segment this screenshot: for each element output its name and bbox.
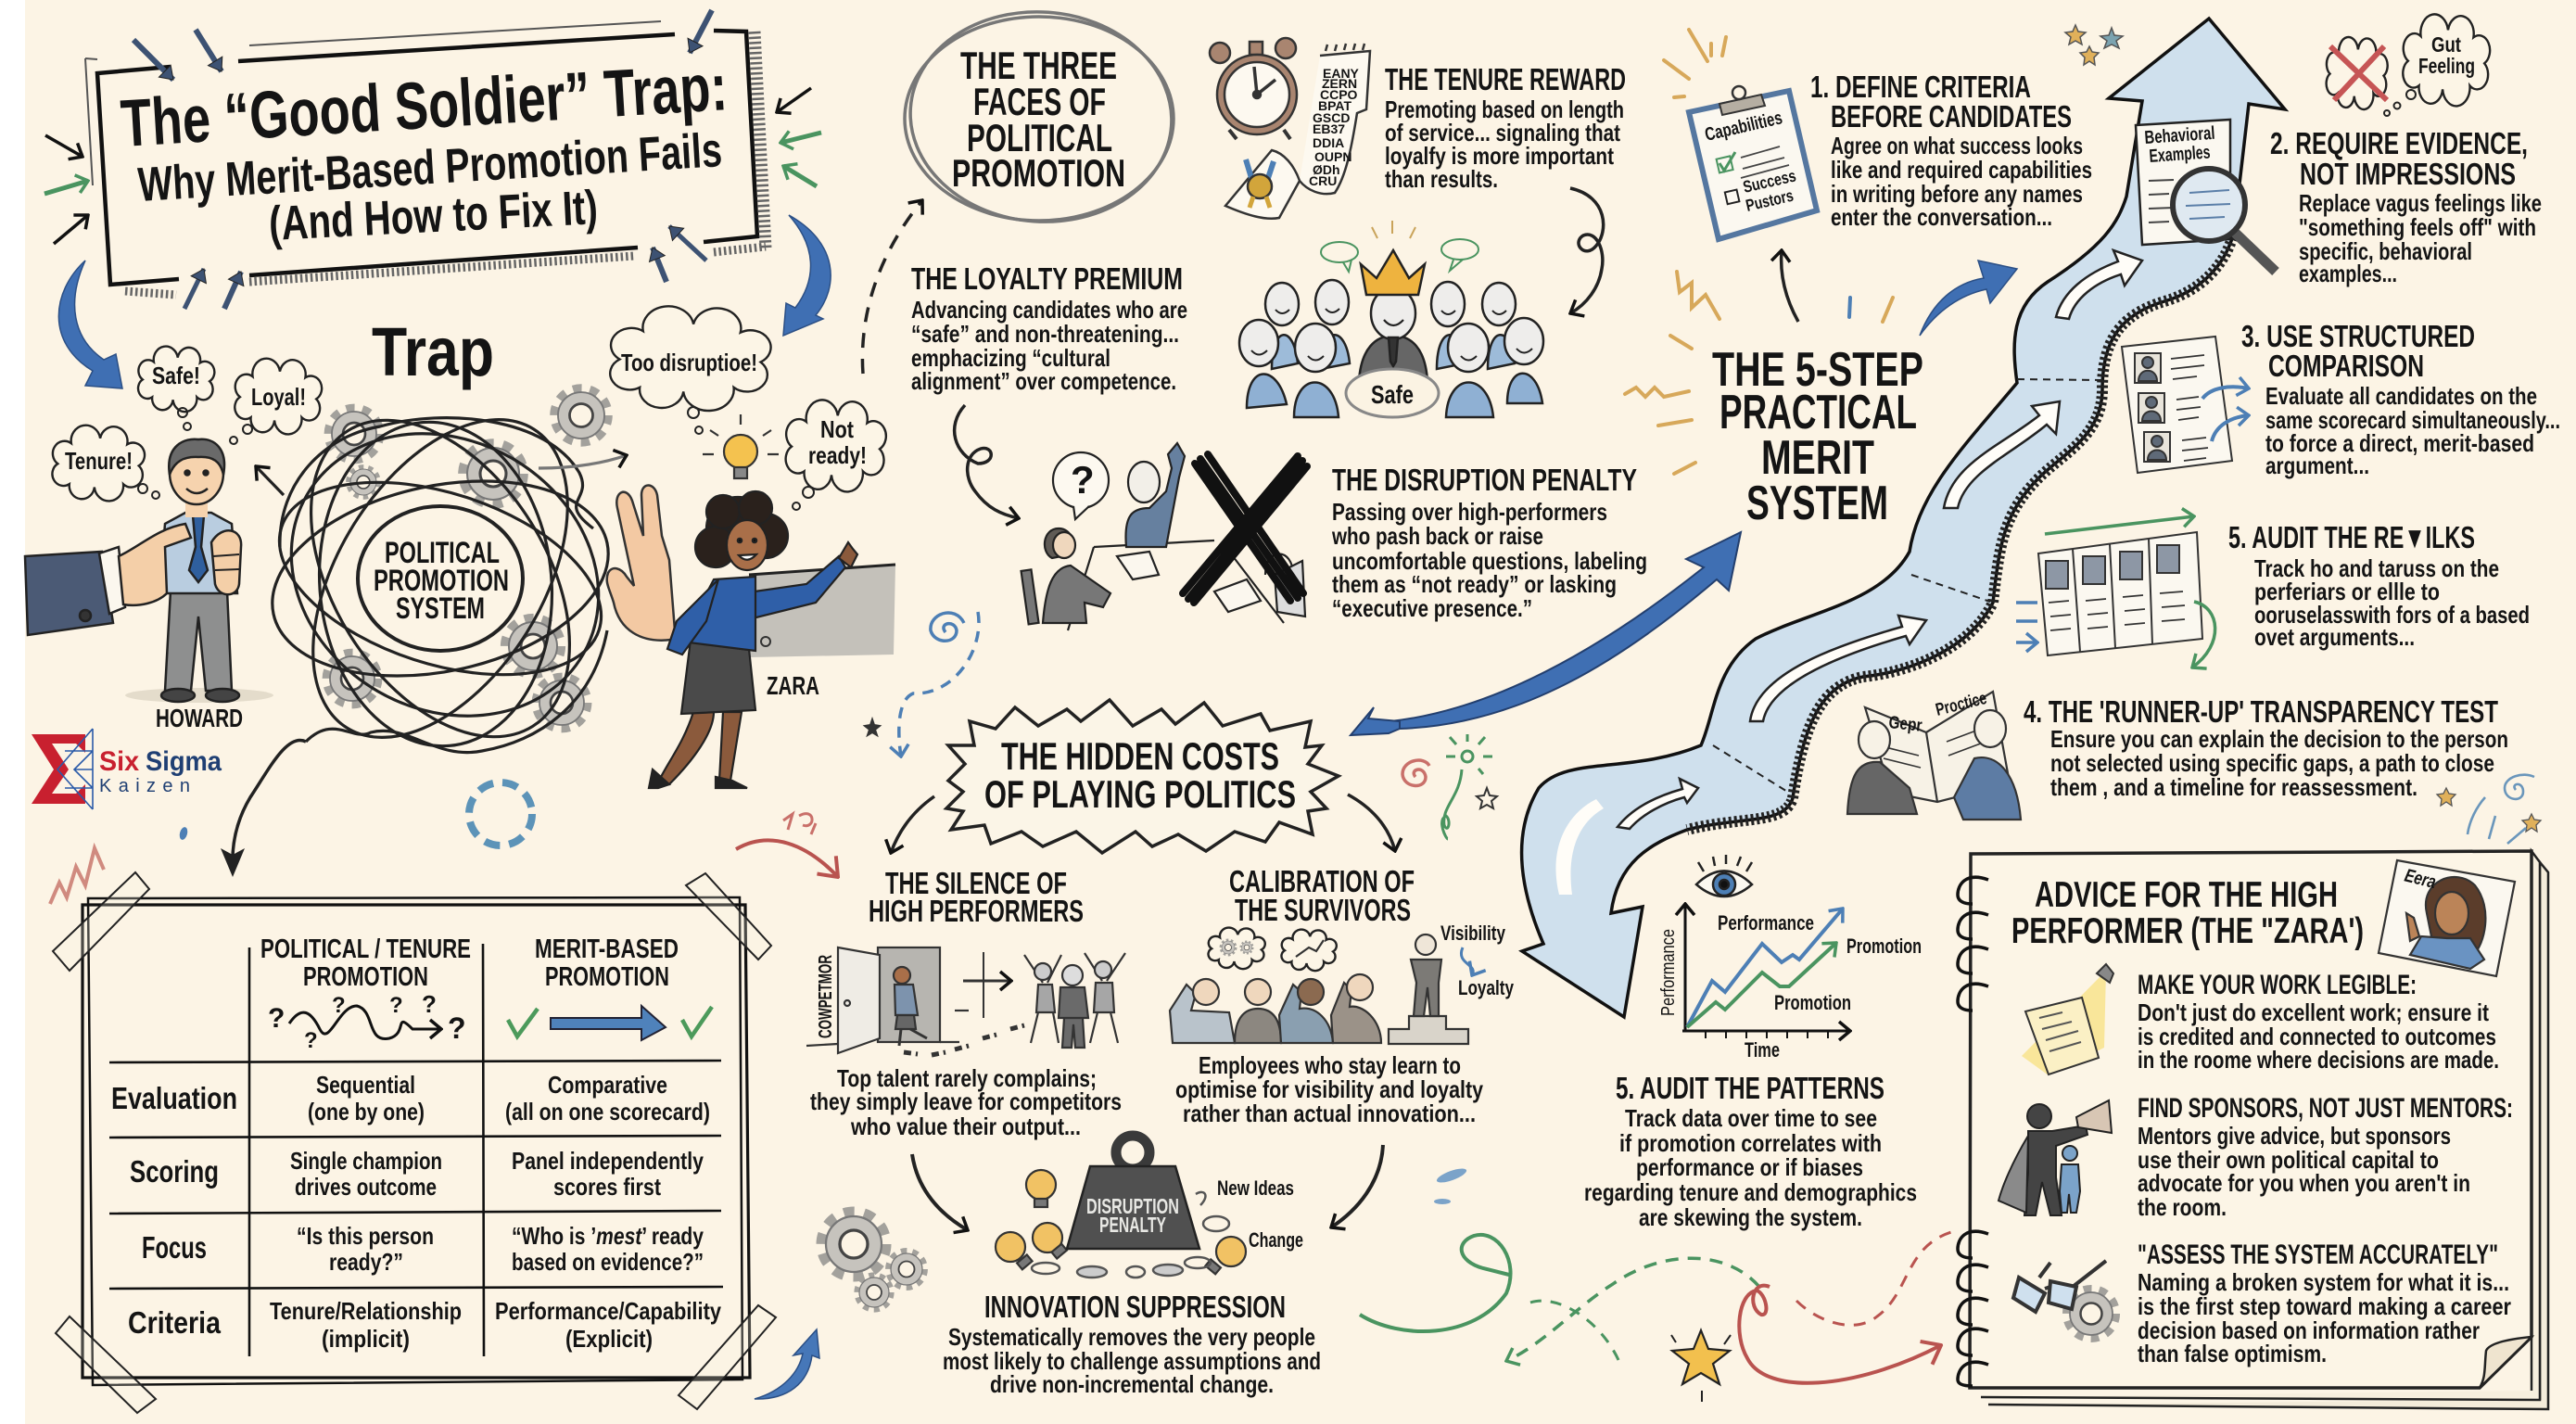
decoration: circular blue arrows [469,782,532,846]
icon: gears bottom [821,1213,925,1309]
icon: star [1671,1330,1731,1402]
arrow: hidden costs to silence [891,796,934,853]
chart: performance versus promotion: Promotion [1774,991,1851,1014]
text: innovation suppression: drive non-incremental change. [990,1370,1274,1398]
merit column cells: “Who is ’mest’ ready [512,1222,704,1250]
thought bubble: Too disruptive [610,306,771,434]
text: silence body: Top talent rarely complains; [837,1064,1097,1092]
thought clouds with gears [1208,928,1337,971]
text: disruption penalty: “executive presence.” [1332,594,1532,622]
icon: sponsor with megaphone [1999,1100,2112,1215]
thought bubble: Safe: Safe! [152,362,200,389]
label: competitor door: COWPETMOR [816,955,836,1038]
text: tenure reward [1385,62,1626,193]
arrow: tangle down to table [233,740,306,867]
text: step 1: Agree on what success looks [1831,132,2083,159]
illustration: survivors saluting [1170,928,1468,1044]
arrow: silence to innovation [912,1154,968,1230]
heading: three faces: PROMOTION [952,151,1125,195]
gears in tangle [326,388,608,729]
weight: DISRUPTION [1086,1194,1179,1218]
text: step 1: enter the conversation... [1831,203,2052,231]
title text [119,50,730,251]
text: step 4: them , and a timeline for reassessment. [2050,773,2417,801]
decoration: gold burst marks [1625,30,1726,474]
text: audit the patterns [1584,1071,1917,1231]
panel: notebook advice [1958,851,2548,1409]
icon: tangled question path: ? [268,1003,285,1034]
arrow: red dashed path [1796,1232,1951,1325]
text: tenure reward: THE TENURE REWARD [1385,62,1626,96]
road lane dashes [1713,379,2102,793]
scroll list text: CCPO [1320,87,1358,102]
text: loyalty premium: THE LOYALTY PREMIUM [911,261,1183,296]
notebook title: PERFORMER (THE "ZARA') [2011,911,2364,951]
thought bubble: Tenure [52,426,159,501]
starburst: hidden costs heading [946,700,1339,853]
scroll list text: EB37 [1313,121,1345,136]
crushed bulbs [996,1170,1246,1274]
icon: clipboard: Capabilities [1703,108,1784,146]
text: disruption penalty: Passing over high-performers [1332,498,1607,526]
table frame [82,897,750,1385]
merit column cells: Panel independently [512,1147,704,1175]
notebook title: ADVICE FOR THE HIGH [2035,875,2338,915]
text: find sponsors: advocate for you when you aren't in [2138,1169,2470,1197]
label: visibility and loyalty: Loyalty [1458,976,1515,999]
merit column cells: (all on one scorecard) [505,1098,710,1125]
text: assess the system: decision based on information rather [2138,1316,2480,1344]
corner tapes [53,872,776,1413]
text: silence body: who value their output... [850,1112,1081,1140]
scroll list text: GSCD [1313,110,1350,125]
row labels: Focus [142,1230,207,1265]
political column cells: ready?” [329,1248,403,1276]
text: step 3: argument... [2265,451,2369,479]
title frame [85,21,766,295]
heading: 5-step system: MERIT [1761,431,1874,485]
text: loyalty premium: Advancing candidates who are [911,296,1187,324]
text: disruption penalty: who pash back or raise [1331,522,1543,550]
text: disruption penalty [1331,463,1647,622]
text: loyalty premium: alignment” over competence. [911,367,1176,395]
behavioral examples document [2136,120,2230,245]
tangle: political promotion system [240,375,650,782]
illustration: meeting with big X: ? [1071,458,1095,502]
text: calibration heading: THE SURVIVORS [1235,893,1411,927]
row labels: Evaluation [111,1081,237,1115]
label: visibility and loyalty [1440,922,1515,999]
merit column cells [495,1071,721,1353]
text: make your work legible: Don't just do excellent work; ensure it [2138,998,2489,1026]
merit column cells: Performance/Capability [495,1297,721,1325]
text: step 2 [2270,126,2542,287]
icon: straight merit path [508,1006,712,1040]
scroll list text: BPAT [1318,98,1351,113]
text: silence body: they simply leave for competitors [810,1087,1122,1115]
text: step 1 [1810,70,2092,231]
icon: clipboard: Success [1741,166,1797,197]
label: visibility and loyalty: Visibility [1440,922,1506,945]
scroll list text: OUPN [1314,149,1351,164]
text: calibration heading: CALIBRATION OF [1229,864,1415,898]
text: audit the results: 5. AUDIT THE RE▼ILKS [2228,520,2475,554]
arrow: small blue up [755,1329,819,1399]
heading: three faces: FACES OF [973,80,1106,123]
scroll list text [1309,66,1360,188]
pinned Zara photo: Eera [2403,866,2438,893]
weight: PENALTY [1099,1213,1166,1237]
starburst: hidden costs heading: THE HIDDEN COSTS [1001,734,1279,778]
arrow: red curve to notebook [1739,1286,1941,1383]
arrow: dashed to three faces [862,200,922,374]
labels: new ideas and change: Change [1249,1228,1303,1252]
gray box behind Zara [749,565,895,657]
heading: three faces [903,3,1179,231]
text: tenure reward: loyalfy is more important [1385,142,1614,170]
row labels: Scoring [130,1154,219,1189]
illustration: loyal crowd [1239,221,1543,417]
icon: magnifier [2173,169,2276,272]
thought bubble: Too disruptive: Too disruptioe! [621,349,757,376]
text: innovation suppression: most likely to challenge assumptions and [943,1347,1321,1375]
title arrows [44,10,821,309]
title [44,10,821,309]
text: calibration body [1175,1051,1483,1127]
scroll list text: DDIA [1313,135,1344,150]
figure: Howard with gripping hand [25,439,273,703]
chart: performance versus promotion: Time [1745,1038,1780,1062]
heading: 5-step system: THE 5-STEP [1712,343,1923,397]
logo: Six Sigma Kaizen: Kaizen [99,776,190,796]
cheering figures [1024,953,1125,1048]
text: audit the results: ovet arguments... [2254,623,2415,651]
text: audit the results: Track ho and taruss on the [2254,554,2499,582]
icon: eye [1696,855,1752,896]
heading: Trap: Trap [372,313,494,390]
merit column cells: based on evidence?” [512,1248,704,1276]
panel: comparison table [53,872,776,1413]
label: Zara: ZARA [767,671,819,700]
text: disruption penalty: THE DISRUPTION PENALTY [1332,463,1637,497]
icon: gut feeling rejected: Gut [2431,32,2461,57]
merit column cells: (Explicit) [565,1325,653,1353]
merit column cells: Comparative [548,1071,667,1099]
label oval: Safe [1346,369,1439,417]
title text: (And How to Fix It) [268,181,599,251]
text: step 2: specific, behavioral [2299,237,2472,265]
decoration: stars top [2065,25,2123,65]
text: step 3: COMPARISON [2268,349,2424,383]
column headers: MERIT-BASED [535,934,679,964]
arrows: sheet to text [2202,387,2249,441]
text: assess the system: than false optimism. [2138,1340,2327,1367]
political column cells: Tenure/Relationship [270,1297,462,1325]
crowned leader [1359,250,1428,382]
behavioral examples document: Examples [2149,142,2211,167]
scroll list text: ØDh [1313,162,1340,177]
column headers: POLITICAL / TENURE [260,934,471,964]
icon: light bulb [703,414,779,478]
text: silence body [810,1064,1122,1140]
text: innovation suppression [943,1290,1321,1398]
text: calibration heading [1229,864,1415,927]
icon: tangled question path: ? [448,1011,466,1045]
chart: performance versus promotion: Promotion [1846,934,1922,958]
political column cells: (implicit) [322,1325,410,1353]
icon: gut feeling rejected [2327,14,2490,116]
debris [1032,1192,1229,1278]
text: audit the patterns: performance or if biases [1636,1153,1863,1181]
text: find sponsors: the room. [2138,1193,2227,1221]
political column cells: Single champion [290,1147,442,1175]
text: calibration body: Employees who stay learn to [1199,1051,1461,1079]
arrows around scorecard [2016,516,2215,668]
back row people [1265,280,1516,369]
decoration: red spiral [1402,760,1429,785]
chart: performance versus promotion: Performance [1658,929,1679,1016]
thought bubble: Tenure: Tenure! [65,447,133,475]
notebook pages [1970,851,2548,1409]
logo: Six Sigma Kaizen [32,729,222,809]
title text: Why Merit-Based Promotion Fails [136,123,724,212]
heading: 5-step system [1712,343,1923,530]
decoration: blue leaves [1434,1165,1468,1204]
tangle centre label [374,536,509,625]
arrow: title to Howard [58,261,122,388]
political column cells: “Is this person [297,1222,434,1250]
notebook rings [1958,877,1988,1386]
table grid [109,944,723,1356]
arrow: heading to road [1920,261,2017,336]
text: silence heading: THE SILENCE OF [885,866,1067,900]
political column cells: (one by one) [308,1098,425,1125]
column headers [260,934,679,992]
text: step 2: examples... [2299,260,2397,287]
labels: new ideas and change: New Ideas [1217,1176,1294,1200]
political column cells: drives outcome [295,1173,437,1201]
decoration: blue spiral with dashed path [899,612,979,756]
text: loyalty premium: emphacizing “cultural [911,344,1110,372]
decoration: short marks [1849,298,1893,322]
text: audit the results: perferiars or ellle to [2254,578,2440,605]
icon: tangled question path: ? [304,1028,318,1053]
text: tenure reward: of service... signaling that [1385,119,1620,146]
icon: tangled question path: ? [389,993,403,1018]
illustration: meeting with big X [1022,443,1305,630]
text: step 3 [2241,319,2560,479]
icon: scorecard with columns [2038,532,2202,655]
icon: tangled question path: ? [332,993,346,1018]
logo: Six Sigma Kaizen: Sigma [146,746,222,777]
arrow: calibration to innovation [1331,1145,1383,1227]
icon: stop hand [607,486,675,641]
text: audit the patterns: 5. AUDIT THE PATTERNS [1616,1071,1884,1105]
front row people [1239,318,1543,417]
decoration: green dashed branch [1530,1301,1621,1367]
text: audit the patterns: Track data over time to see [1625,1104,1877,1132]
icon: clipboard [1689,86,1817,239]
starburst: hidden costs heading: OF PLAYING POLITICS [984,772,1296,816]
text: step 1: in writing before any names [1831,180,2083,208]
weight [1067,1136,1199,1249]
text: loyalty premium [911,261,1187,395]
decoration: green flower [1442,734,1492,839]
text: make your work legible [2138,970,2499,1074]
road hatched edge [1687,232,2234,830]
illustration: leaving through door [806,947,1011,1053]
political column cells: Sequential [316,1071,415,1099]
text: silence heading: HIGH PERFORMERS [869,894,1084,928]
text: tenure reward: than results. [1385,165,1498,193]
thought bubble: Not ready: Not [820,415,854,443]
scroll list text: CRU [1309,173,1337,188]
text: innovation suppression: Systematically removes the very people [948,1323,1315,1351]
notebook title [2011,875,2364,951]
big black X [1183,454,1307,603]
labels: new ideas and change [1217,1176,1303,1252]
text: disruption penalty: them as “not ready” or lasking [1332,570,1617,598]
thought bubble: Safe [138,347,214,430]
pinned Zara photo [2379,860,2515,976]
thought bubble: Not ready: ready! [808,441,867,469]
text: innovation suppression: INNOVATION SUPPRESSION [984,1290,1286,1324]
text: step 1: like and required capabilities [1831,156,2092,184]
icon: spotlight on document [2022,964,2113,1075]
decoration: red zigzag [50,848,104,904]
icon: candidate comparison sheet [2122,337,2232,473]
road white arrows [1555,250,2142,895]
arrow: curly to crowd [1570,188,1604,313]
icon: glasses and gear [2013,1261,2115,1338]
icon: clock and scroll [1210,38,1370,219]
heading: three faces: THE THREE [960,44,1117,87]
text: step 1: 1. DEFINE CRITERIA [1810,70,2031,104]
political column cells [270,1071,462,1353]
arrow: title to Zara [783,215,831,336]
tangled lines [240,375,650,782]
thought bubble: Loyal [230,359,322,444]
label: Howard: HOWARD [156,704,243,732]
arrow: heading up to clipboard [1782,250,1798,322]
decoration: green dashed path [1506,1258,1759,1361]
decoration: red arrow and marks [736,814,838,877]
merit column cells: scores first [553,1173,661,1201]
thought bubble: Not ready [786,400,886,510]
column headers: PROMOTION [303,962,428,992]
icon: two people with open book [1847,689,2021,820]
text: make your work legible: MAKE YOUR WORK LEGIBLE: [2138,970,2417,1000]
heading: 5-step system: PRACTICAL [1719,386,1917,439]
chart: performance versus promotion: Performance [1718,911,1814,934]
text: audit the patterns: regarding tenure and demographics [1584,1178,1917,1206]
text: tenure reward: Premoting based on length [1385,95,1624,123]
icon: tangled question path: ? [422,990,437,1018]
footprints [904,1025,1024,1055]
text: audit the results [2228,520,2530,651]
text: calibration body: optimise for visibility and loyalty [1175,1075,1483,1103]
text: loyalty premium: “safe” and non-threatening... [911,320,1179,348]
arrow: hidden costs to calibration [1348,795,1395,851]
text: silence heading [869,866,1084,928]
row labels [111,1081,237,1340]
text: disruption penalty: uncomfortable questions, labeling [1332,547,1647,575]
text: find sponsors [2138,1093,2513,1221]
illustration: disruption penalty weight [996,1136,1303,1278]
decoration: green curl [1360,1235,1511,1331]
thought bubble: Loyal: Loyal! [251,383,306,411]
icon: gut feeling rejected: Feeling [2418,54,2475,78]
logo: Six Sigma Kaizen: Six [99,746,139,777]
text: assess the system [2138,1240,2511,1367]
arrow: curly to meeting [955,405,1019,518]
text: step 3: 3. USE STRUCTURED [2241,319,2475,353]
column headers: PROMOTION [545,962,669,992]
icon: clipboard: Pustors [1744,186,1796,215]
tangle centre label: PROMOTION [374,564,509,597]
decoration: small stars [865,719,1497,808]
arrowhead: to table [221,848,245,877]
tangle centre label: SYSTEM [396,591,485,625]
icon: tangled question path [268,990,466,1053]
scroll list text: EANY [1323,66,1360,81]
icon: two people with open book: Gepr [1887,713,1923,736]
long blue arrow [1351,532,1741,735]
text: find sponsors: Mentors give advice, but sponsors [2138,1122,2451,1150]
scroll list text: ZERN [1322,76,1357,91]
text: make your work legible: is credited and connected to outcomes [2138,1023,2496,1050]
text: calibration body: rather than actual innovation... [1183,1100,1476,1127]
speech bubbles over crowd [1321,221,1478,272]
text: audit the patterns: if promotion correlates with [1619,1129,1882,1157]
row labels: Criteria [128,1305,222,1340]
text: audit the patterns: are skewing the system. [1639,1203,1862,1231]
behavioral examples document: Behavioral [2144,123,2215,148]
tangle centre label: POLITICAL [385,536,500,569]
chart: performance versus promotion [1658,904,1922,1062]
text: step 4 [2024,694,2508,801]
text: assess the system: is the first step toward making a career [2138,1292,2511,1320]
text: step 1: BEFORE CANDIDATES [1831,99,2072,134]
icon: two people with open book: Proctice [1934,689,1989,720]
heading: three faces: POLITICAL [967,116,1112,159]
title text: The “Good Soldier” Trap: [119,50,730,161]
decoration: stars and spiral [2437,775,2541,844]
figure: Zara [649,491,857,788]
text: find sponsors: use their own political capital to [2138,1146,2439,1174]
label oval: Safe: Safe [1371,380,1414,409]
decoration: blue drops [178,826,189,841]
heading: 5-step system: SYSTEM [1746,477,1888,530]
road: upward arrow path [1521,19,2285,1017]
